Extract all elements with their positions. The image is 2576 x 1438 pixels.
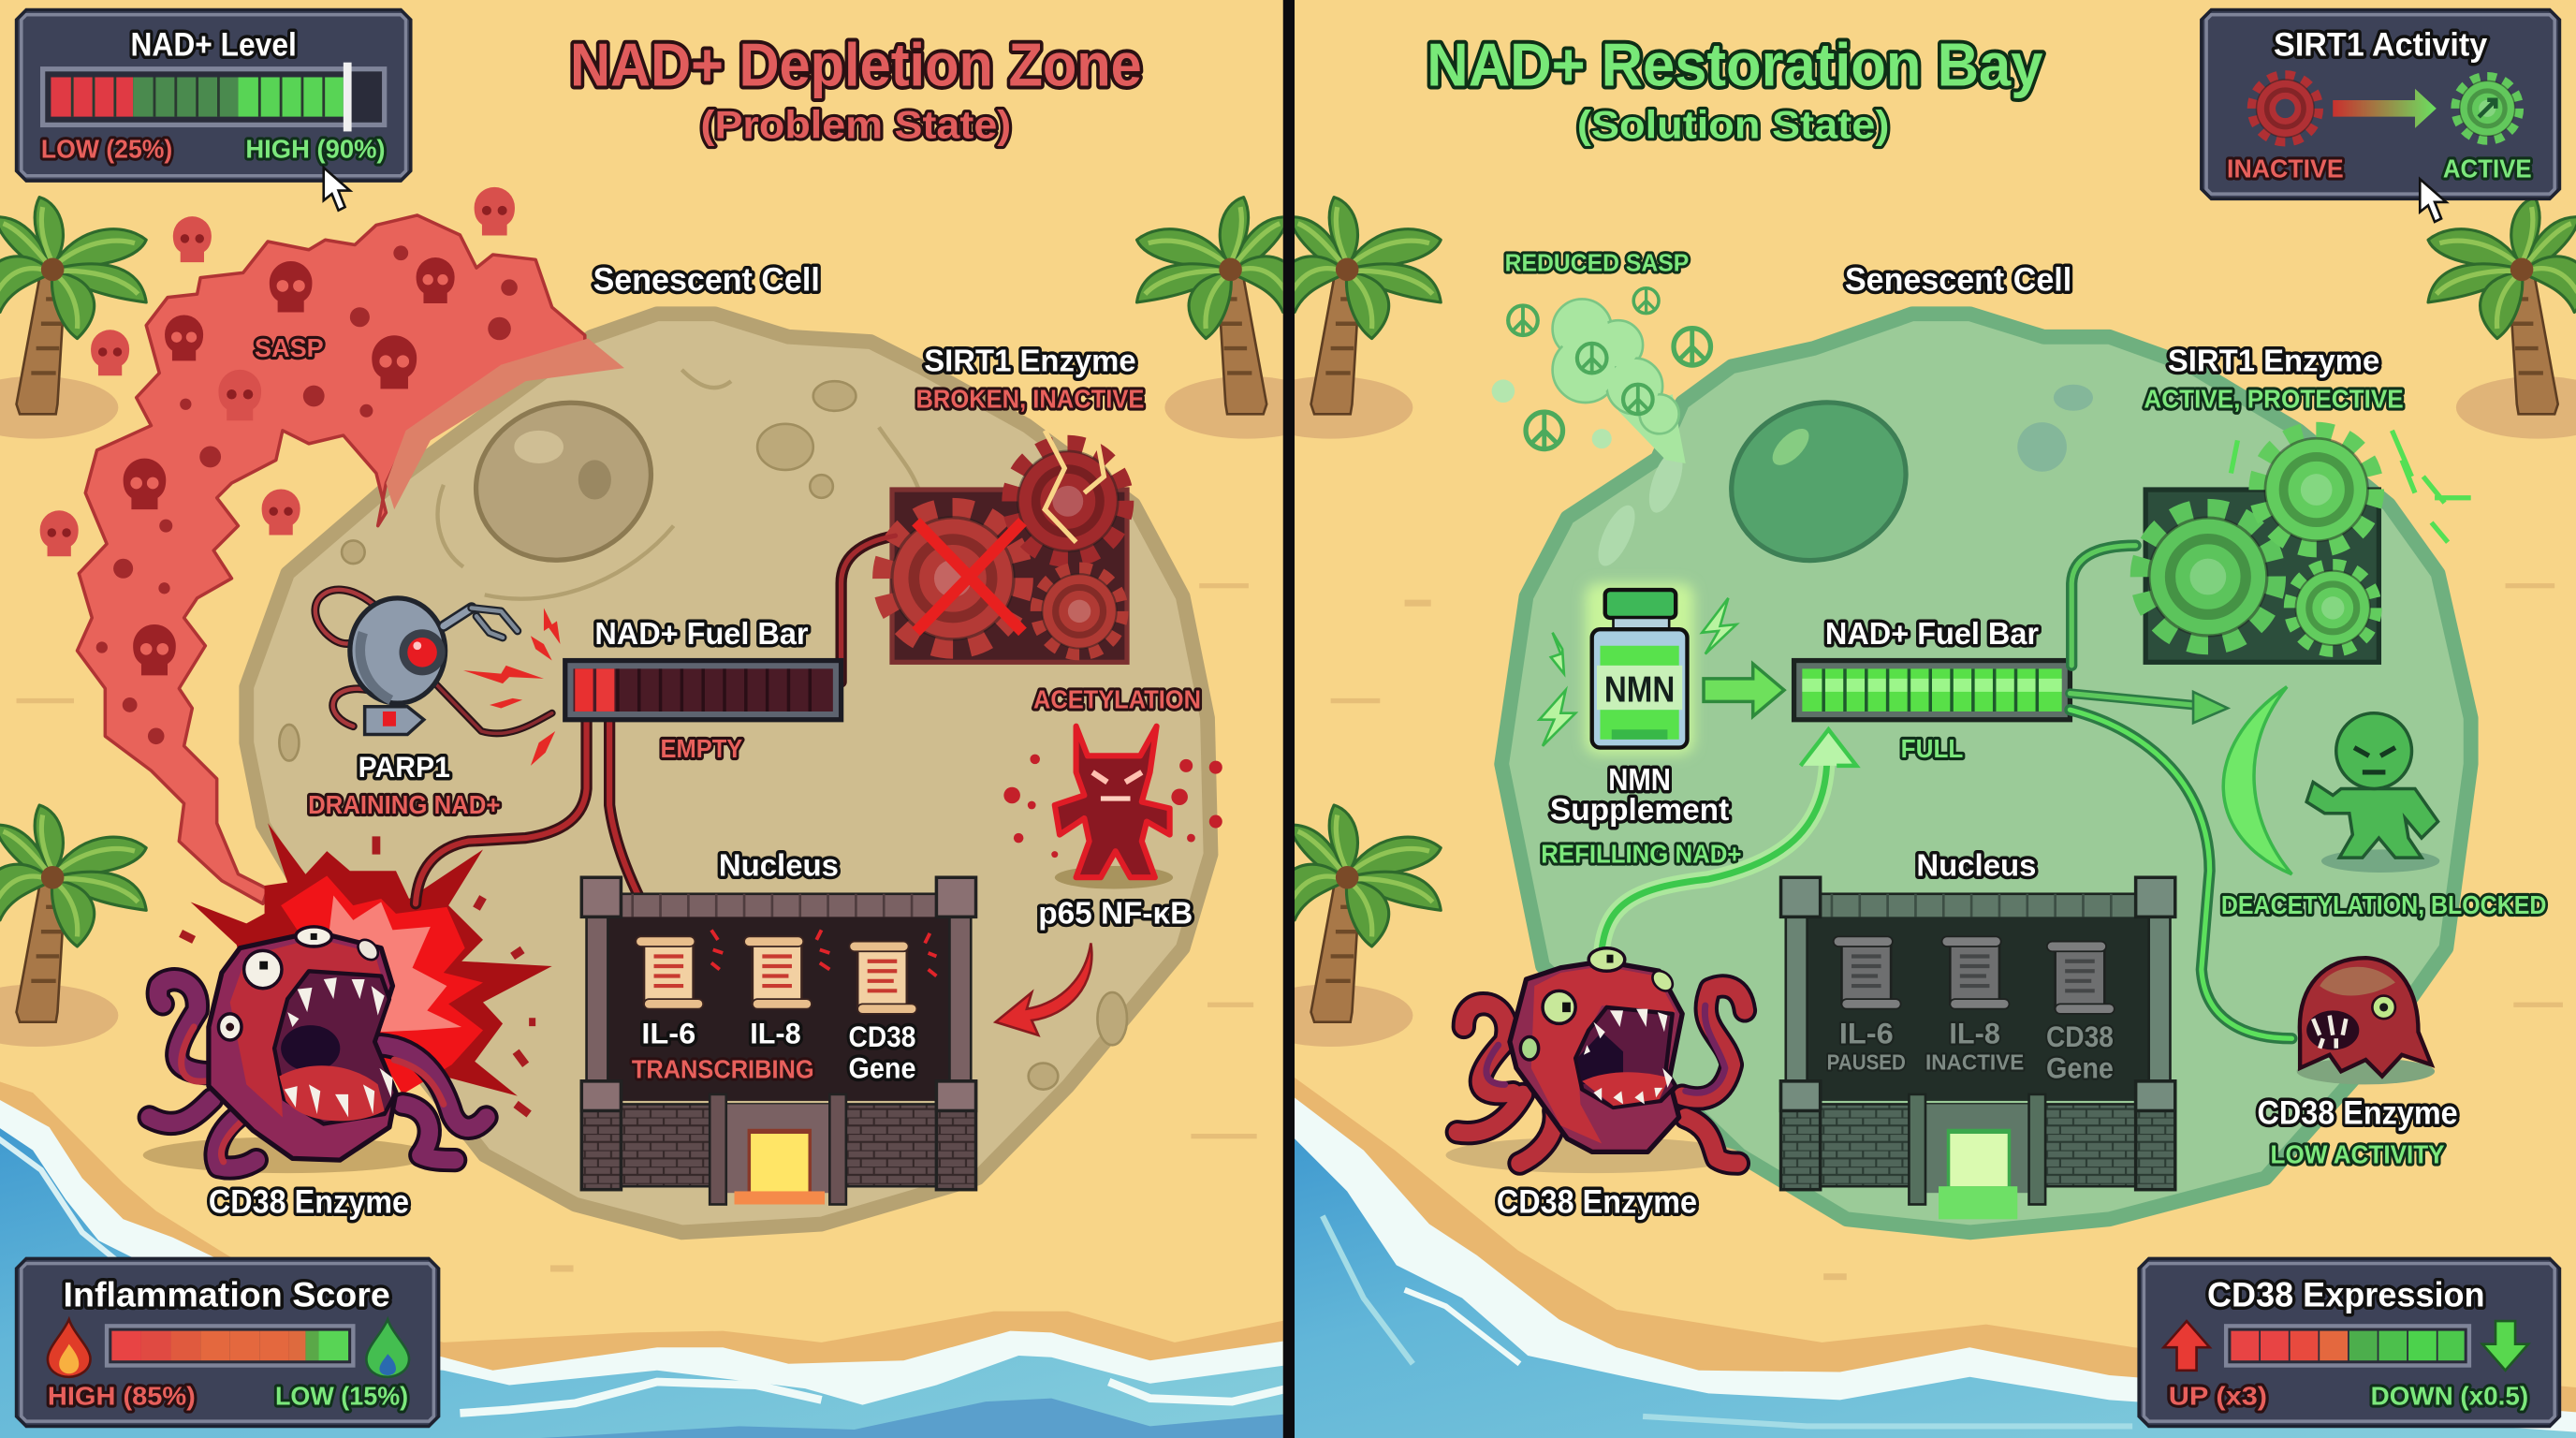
active gear icon bbox=[2456, 78, 2518, 139]
icon: cursor left bbox=[324, 168, 350, 211]
title: restoration bay: NAD+ Restoration Bay bbox=[1427, 30, 2042, 98]
title: depletion zone bbox=[570, 30, 1142, 146]
label: CD38 Enzyme, right: CD38 Enzyme bbox=[1497, 1183, 1697, 1220]
reduced SASP cloud bbox=[1492, 288, 1711, 463]
paused scrolls bbox=[1834, 936, 2115, 1014]
subtitle: problem state: (Problem State) bbox=[701, 102, 1011, 146]
label: acetylation: ACETYLATION bbox=[1033, 684, 1201, 713]
panel title: Inflammation Score bbox=[64, 1275, 390, 1313]
drifting dots bbox=[1492, 379, 1612, 448]
beach: left panel sea and shoreline bbox=[0, 1077, 1298, 1438]
arrow: NMN to fuel bar bbox=[1704, 664, 1784, 716]
label: NMN supplement: Supplement bbox=[1550, 793, 1729, 828]
high and low readouts bbox=[48, 1382, 408, 1411]
monster eyes bbox=[1520, 948, 1676, 1060]
nucleus organelle, left bbox=[454, 378, 673, 584]
panel: NAD+ Level bbox=[17, 10, 411, 181]
palm tree, top right of left panel bbox=[1134, 196, 1283, 438]
label: draining NAD+: DRAINING NAD+ bbox=[308, 790, 500, 819]
p65 NF-kB demon bbox=[1003, 726, 1222, 889]
label: Senescent Cell, left: Senescent Cell bbox=[593, 262, 820, 299]
broken crack bbox=[1045, 431, 1104, 542]
fortress nucleus, right bbox=[1781, 877, 2175, 1219]
gene labels: Gene bbox=[849, 1050, 915, 1084]
gene labels, silenced: IL-6 bbox=[1839, 1016, 1894, 1049]
fortress nucleus, left bbox=[581, 877, 976, 1204]
low and high readouts: HIGH (90%) bbox=[245, 134, 386, 163]
inactive gear icon bbox=[2253, 76, 2318, 141]
inactive and active labels bbox=[2227, 154, 2532, 183]
panel divider bbox=[1283, 0, 1295, 1438]
gene labels: CD38 bbox=[849, 1020, 915, 1053]
beach: right panel sea and shoreline bbox=[1281, 1068, 2576, 1438]
icon: red flame bbox=[48, 1319, 91, 1377]
low and high readouts bbox=[41, 134, 386, 163]
sand marks bbox=[17, 583, 2563, 1280]
high and low readouts: HIGH (85%) bbox=[48, 1382, 196, 1411]
title: depletion zone: NAD+ Depletion Zone bbox=[570, 30, 1142, 98]
label: NMN supplement: NMN bbox=[1608, 763, 1671, 798]
gene labels bbox=[632, 1016, 915, 1084]
palm tree, top left bbox=[0, 198, 146, 439]
label: full: FULL bbox=[1901, 734, 1963, 763]
SIRT1 shield arc bbox=[2223, 687, 2291, 874]
red particles bbox=[1003, 755, 1222, 858]
up and down readouts bbox=[2169, 1382, 2528, 1411]
small CD38 enzyme, low activity bbox=[2297, 958, 2435, 1084]
label: Nucleus, right: Nucleus bbox=[1916, 848, 2036, 883]
arrow: p65 to nucleus bbox=[996, 943, 1091, 1035]
label: broken inactive: BROKEN, INACTIVE bbox=[915, 384, 1144, 413]
glowing green door bbox=[1947, 1129, 2011, 1195]
transcribing sparks bbox=[711, 930, 936, 976]
label: active protective: ACTIVE, PROTECTIVE bbox=[2144, 384, 2404, 413]
gene labels: IL-8 bbox=[750, 1016, 801, 1049]
score bar bbox=[107, 1326, 353, 1365]
label: NAD+ Fuel Bar, left: NAD+ Fuel Bar bbox=[594, 617, 809, 652]
gene labels, silenced: PAUSED bbox=[1827, 1050, 1906, 1075]
panel: CD38 Expression bbox=[2139, 1258, 2559, 1426]
up and down readouts: UP (x3) bbox=[2169, 1382, 2267, 1411]
gene labels, silenced: IL-8 bbox=[1949, 1016, 2000, 1049]
SIRT1 active gears bbox=[2142, 431, 2471, 662]
label: NAD+ Fuel Bar, right: NAD+ Fuel Bar bbox=[1825, 617, 2039, 652]
SASP cloud, left bbox=[40, 187, 624, 903]
monster eyes bbox=[218, 927, 382, 1040]
palm tree, lower left bbox=[0, 805, 146, 1047]
red X bbox=[920, 526, 1018, 627]
glowing door bbox=[748, 1129, 812, 1195]
panel: Inflammation Score bbox=[17, 1258, 439, 1426]
monster mouth bbox=[274, 971, 396, 1123]
label: reduced SASP: REDUCED SASP bbox=[1505, 249, 1689, 277]
label: CD38 Enzyme, left: CD38 Enzyme bbox=[209, 1183, 409, 1220]
icon: green flame bbox=[366, 1319, 409, 1377]
burst debris bbox=[181, 836, 535, 1114]
up and down readouts: DOWN (x0.5) bbox=[2371, 1382, 2528, 1411]
low and high readouts: LOW (25%) bbox=[41, 134, 172, 163]
label: SIRT1 Enzyme, left: SIRT1 Enzyme bbox=[924, 345, 1136, 379]
p65 subdued figure bbox=[2306, 713, 2439, 873]
gene labels, silenced: Gene bbox=[2046, 1050, 2114, 1084]
panel title: CD38 Expression bbox=[2207, 1275, 2485, 1313]
label: NMN supplement bbox=[1550, 763, 1729, 828]
CD38 monster, right bbox=[1445, 948, 1745, 1173]
wires from fuel bar to CD38 and nucleus bbox=[416, 536, 896, 903]
icon: up arrow bbox=[2163, 1321, 2210, 1371]
peace symbols bbox=[1508, 288, 1711, 449]
icon: down arrow bbox=[2482, 1321, 2528, 1371]
inactive and active labels: INACTIVE bbox=[2227, 154, 2344, 183]
icon: cursor right bbox=[2420, 179, 2446, 222]
gene labels, silenced: CD38 bbox=[2046, 1020, 2114, 1053]
fuel bar empty bbox=[565, 661, 842, 720]
panel title: SIRT1 Activity bbox=[2274, 27, 2488, 64]
label: PARP1: PARP1 bbox=[359, 750, 450, 784]
PARP1 robot bbox=[315, 590, 560, 766]
NMN supplement bottle: NMN bbox=[1604, 669, 1675, 710]
panel title: NAD+ Level bbox=[131, 27, 297, 64]
CD38 burst bbox=[181, 823, 552, 1114]
expression bar bbox=[2226, 1326, 2469, 1365]
label: low activity: LOW ACTIVITY bbox=[2271, 1140, 2445, 1169]
wires: fuel bar to gears, shield and CD38 bbox=[2070, 546, 2291, 1038]
transition arrow bbox=[2333, 89, 2437, 128]
label: Senescent Cell, right: Senescent Cell bbox=[1845, 262, 2071, 299]
label: Nucleus, left: Nucleus bbox=[719, 848, 839, 883]
plume fading into cell bbox=[386, 339, 624, 509]
nucleus organelle, right bbox=[1707, 376, 1930, 586]
monster mouth bbox=[1575, 1007, 1676, 1108]
monster teeth bbox=[1584, 1009, 1673, 1104]
label: SIRT1 Enzyme, right: SIRT1 Enzyme bbox=[2168, 345, 2379, 379]
energy bolts bbox=[1540, 598, 1736, 746]
subtitle: solution state: (Solution State) bbox=[1577, 102, 1889, 146]
level bar bbox=[43, 63, 385, 131]
skulls in cloud bbox=[124, 257, 455, 675]
gene labels: IL-6 bbox=[641, 1016, 695, 1049]
cell vesicles bbox=[2017, 385, 2093, 472]
lightning sparks bbox=[463, 608, 560, 766]
label: CD38 Enzyme, small: CD38 Enzyme bbox=[2258, 1094, 2458, 1131]
toxin dots bbox=[96, 245, 518, 744]
senescent cell, restored bbox=[1501, 314, 2471, 1232]
cell organelles bbox=[279, 381, 1127, 1090]
high and low readouts: LOW (15%) bbox=[275, 1382, 408, 1411]
motion sparks bbox=[2231, 431, 2471, 542]
CD38 monster, left bbox=[143, 927, 487, 1173]
cell creases bbox=[438, 370, 920, 599]
label: p65 NF-kB: p65 NF-κB bbox=[1038, 896, 1193, 931]
palm tree group, right panel bbox=[1249, 198, 2576, 1047]
arrow: CD38 to fuel bar refill bbox=[1602, 729, 1856, 949]
monster teeth bbox=[285, 977, 392, 1117]
senescent cell, depleted bbox=[246, 314, 1211, 1232]
cell highlights bbox=[1590, 446, 1690, 571]
fuel bar full bbox=[1794, 661, 2070, 720]
active scrolls bbox=[636, 936, 916, 1014]
inactive and active labels: ACTIVE bbox=[2443, 154, 2532, 183]
label: refilling NAD+: REFILLING NAD+ bbox=[1541, 839, 1741, 868]
gene labels: TRANSCRIBING bbox=[632, 1054, 814, 1083]
title: restoration bay bbox=[1427, 30, 2042, 146]
gene labels, silenced bbox=[1827, 1016, 2114, 1084]
wire: fuel bar to SIRT1 bbox=[842, 536, 896, 682]
gene labels, silenced: INACTIVE bbox=[1925, 1050, 2024, 1075]
panel: SIRT1 Activity bbox=[2202, 10, 2559, 198]
label: SASP: SASP bbox=[255, 333, 324, 362]
label: empty: EMPTY bbox=[661, 734, 743, 763]
NMN supplement bottle bbox=[1540, 583, 1736, 755]
SIRT1 broken gears bbox=[885, 431, 1127, 662]
floating skulls bbox=[40, 187, 515, 556]
